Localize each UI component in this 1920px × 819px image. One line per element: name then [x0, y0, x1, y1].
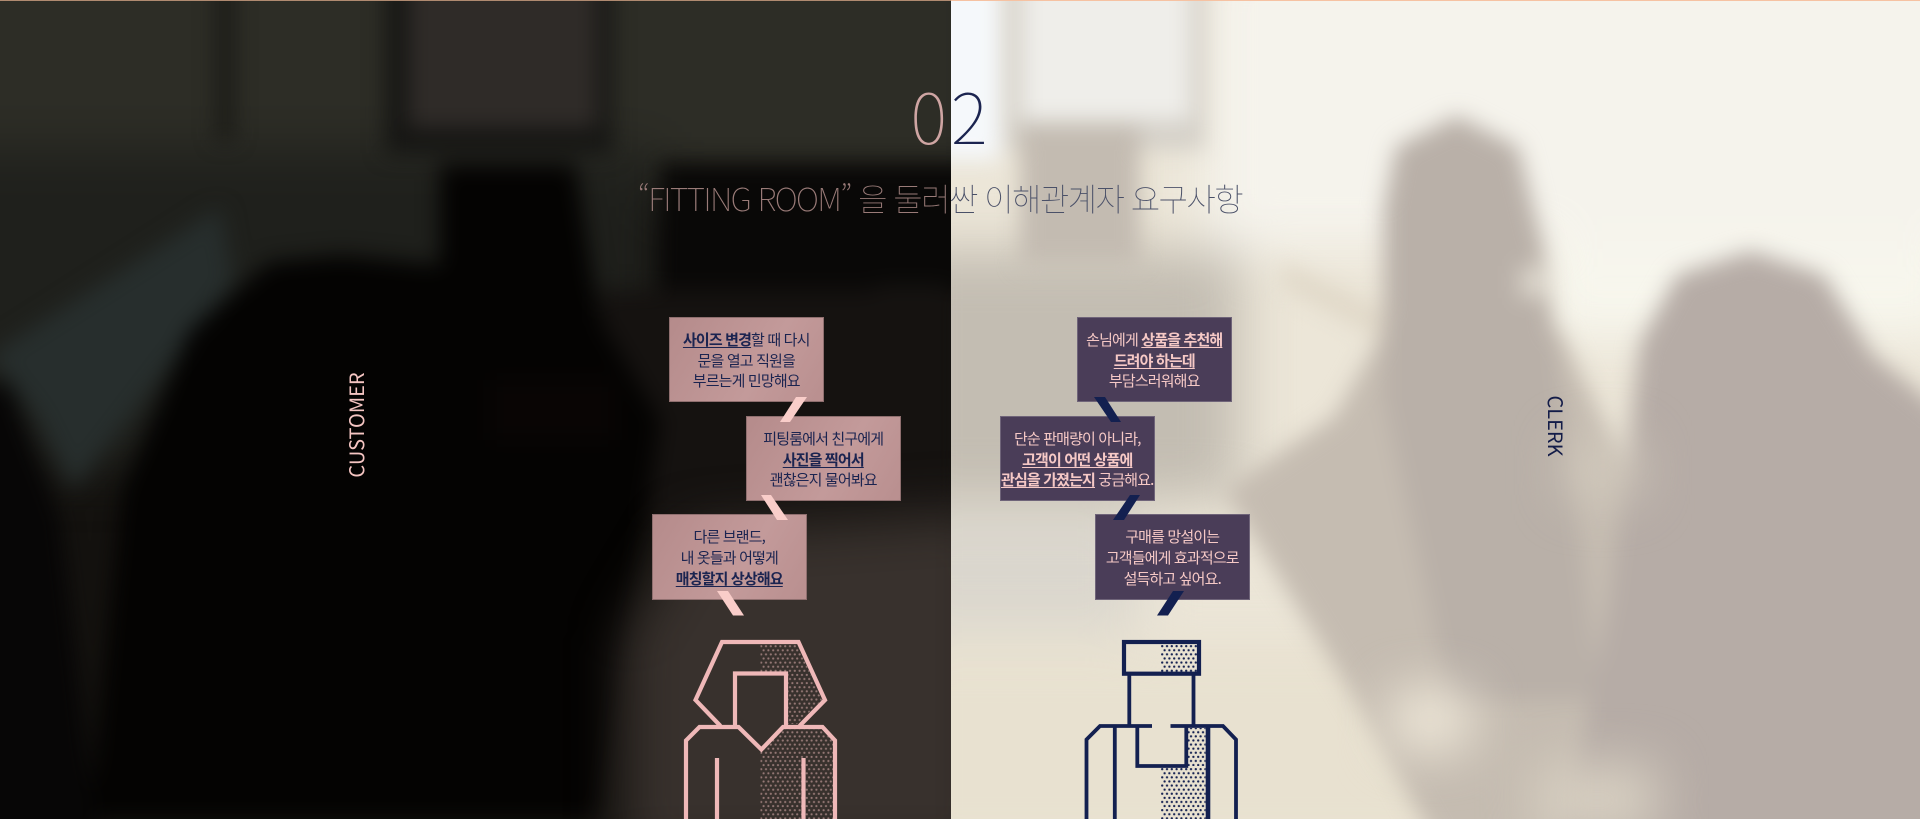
- speech bubble: clerk 1: 부담스러워해요: [1109, 370, 1200, 391]
- speech bubble: customer 2: 사진을 찍어서: [783, 449, 864, 470]
- speech bubble: customer 1: 부르는게 민망해요: [693, 370, 800, 391]
- background: dark blurred photo (customer side): [0, 1, 951, 819]
- speech bubble: customer 3: 매칭할지 상상해요: [676, 568, 783, 589]
- speech bubble: customer 1: [669, 317, 824, 422]
- section title: “FITTING ROOM” 을 둘러싼 이해관계자 요구사항: [638, 175, 1242, 221]
- speech bubble: clerk 2: 고객이 어떤 상품에: [1022, 449, 1132, 470]
- icon: customer figure: [684, 640, 838, 819]
- speech bubble: customer 3: 다른 브랜드,: [694, 526, 765, 547]
- speech bubble: customer 1: 문을 열고 직원을: [698, 350, 795, 371]
- speech bubble: customer 2: [746, 416, 901, 520]
- icon: clerk figure: [1084, 640, 1238, 819]
- speech bubble: clerk 2: 관심을 가졌는지 궁금해요.: [1001, 469, 1154, 490]
- top accent line: [0, 0, 1920, 1]
- speech bubble: clerk 1: [1077, 317, 1232, 422]
- speech bubble: customer 2: 피팅룸에서 친구에게: [763, 428, 883, 449]
- speech bubble: customer 3: [652, 514, 807, 616]
- speech bubble: clerk 3: 설득하고 싶어요.: [1124, 568, 1221, 589]
- speech bubble: clerk 3: [1095, 514, 1250, 616]
- label: clerk: CLERK: [1542, 395, 1571, 457]
- label: customer: CUSTOMER: [341, 372, 370, 478]
- speech bubble: customer 1: 사이즈 변경할 때 다시: [683, 329, 810, 350]
- speech bubble: clerk 3: 고객들에게 효과적으로: [1106, 547, 1239, 568]
- speech bubble: customer 3: 내 옷들과 어떻게: [681, 547, 778, 568]
- section title: [540, 173, 1340, 223]
- speech bubble: clerk 2: [1000, 416, 1155, 520]
- section number: [851, 65, 1051, 165]
- speech bubble: clerk 1: 드려야 하는데: [1114, 350, 1195, 371]
- speech bubble: clerk 2: 단순 판매량이 아니라,: [1014, 428, 1141, 449]
- section number: 02: [911, 64, 991, 165]
- speech bubble: customer 2: 괜찮은지 물어봐요: [770, 469, 877, 490]
- background: light blurred photo (clerk side): [951, 1, 1920, 819]
- speech bubble: clerk 3: 구매를 망설이는: [1125, 526, 1219, 547]
- speech bubble: clerk 1: 손님에게 상품을 추천해: [1086, 329, 1222, 350]
